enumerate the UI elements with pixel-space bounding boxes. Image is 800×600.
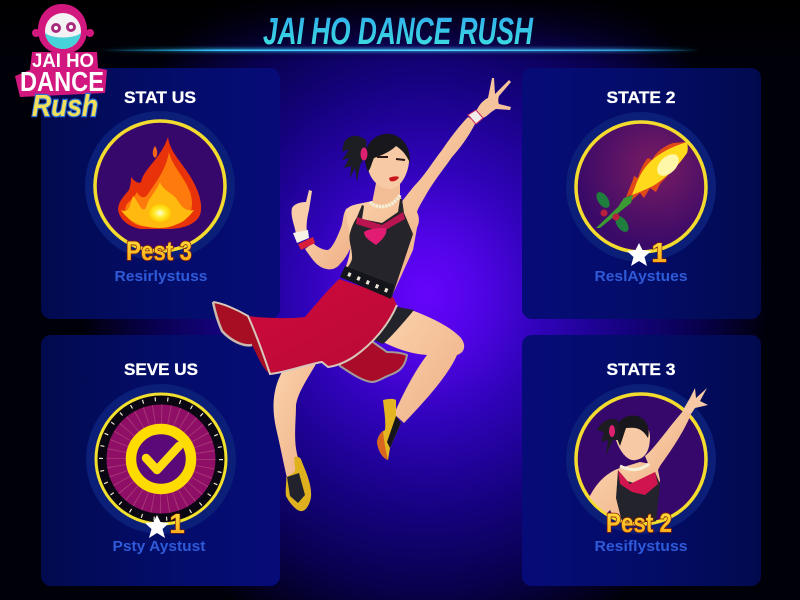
pointing arm (292, 190, 354, 269)
panel: state 3 (522, 335, 761, 586)
hair (365, 134, 410, 172)
score: star 1: 1 (169, 508, 185, 539)
title: JAI HO DANCE RUSH (263, 11, 534, 53)
heading: seve us: SEVE US (124, 361, 198, 379)
logo badge (15, 52, 107, 97)
medallion: check wheel (86, 384, 236, 534)
rear skirt (340, 340, 407, 382)
torso (340, 196, 417, 299)
icon: dancer bust (588, 388, 708, 525)
score: star 1 (145, 508, 185, 539)
heading: stat us: STAT US (124, 89, 196, 107)
panel: stat us (41, 68, 280, 319)
logo text: dance: DANCE (20, 66, 104, 97)
shoe (286, 457, 311, 511)
label: reslaystues: ReslAystues (594, 268, 688, 285)
logo text: rush: Rush (32, 88, 98, 123)
bracelet (298, 237, 315, 250)
medallion: dancer portrait (566, 384, 716, 534)
label: resiflystuss: Resiflystuss (594, 538, 688, 555)
label: psty aystust: Psty Aystust (112, 538, 206, 555)
supporting leg (274, 364, 316, 511)
shorts (369, 306, 414, 344)
medallion: torch (566, 112, 716, 262)
central dancer figure (213, 78, 511, 511)
heading: state 3: STATE 3 (606, 361, 676, 379)
neck and necklace (370, 176, 400, 207)
head (342, 134, 410, 189)
shoe (377, 399, 401, 460)
score: star 1 (627, 237, 667, 268)
panel: state 2 (522, 68, 761, 319)
skirt (213, 279, 397, 374)
logo text: jai ho: JAI HO (32, 51, 94, 72)
raised arm (400, 78, 511, 233)
icon: flame (118, 137, 201, 229)
score: star 1: 1 (651, 237, 667, 268)
label: resirlystuss: Resirlystuss (114, 268, 208, 285)
logo mascot (32, 4, 94, 54)
bracelet (468, 110, 483, 124)
belt (340, 266, 394, 299)
hair flower (360, 148, 368, 160)
panel: seve us (41, 335, 280, 586)
icon: flaming torch (594, 142, 688, 234)
hand (476, 78, 511, 118)
hand (292, 190, 312, 234)
medallion: flame (85, 111, 235, 261)
score: pest 2: Pest 2 (606, 508, 672, 538)
logo: jai ho dance rush (15, 4, 107, 123)
score: pest 3: Pest 3 (126, 236, 192, 266)
title underline (100, 48, 700, 52)
ponytail (342, 136, 367, 182)
lips (389, 176, 399, 181)
bracelet (293, 230, 309, 243)
icon: check mark (146, 446, 179, 470)
raised leg (377, 310, 464, 460)
heading: state 2: STATE 2 (606, 89, 676, 107)
